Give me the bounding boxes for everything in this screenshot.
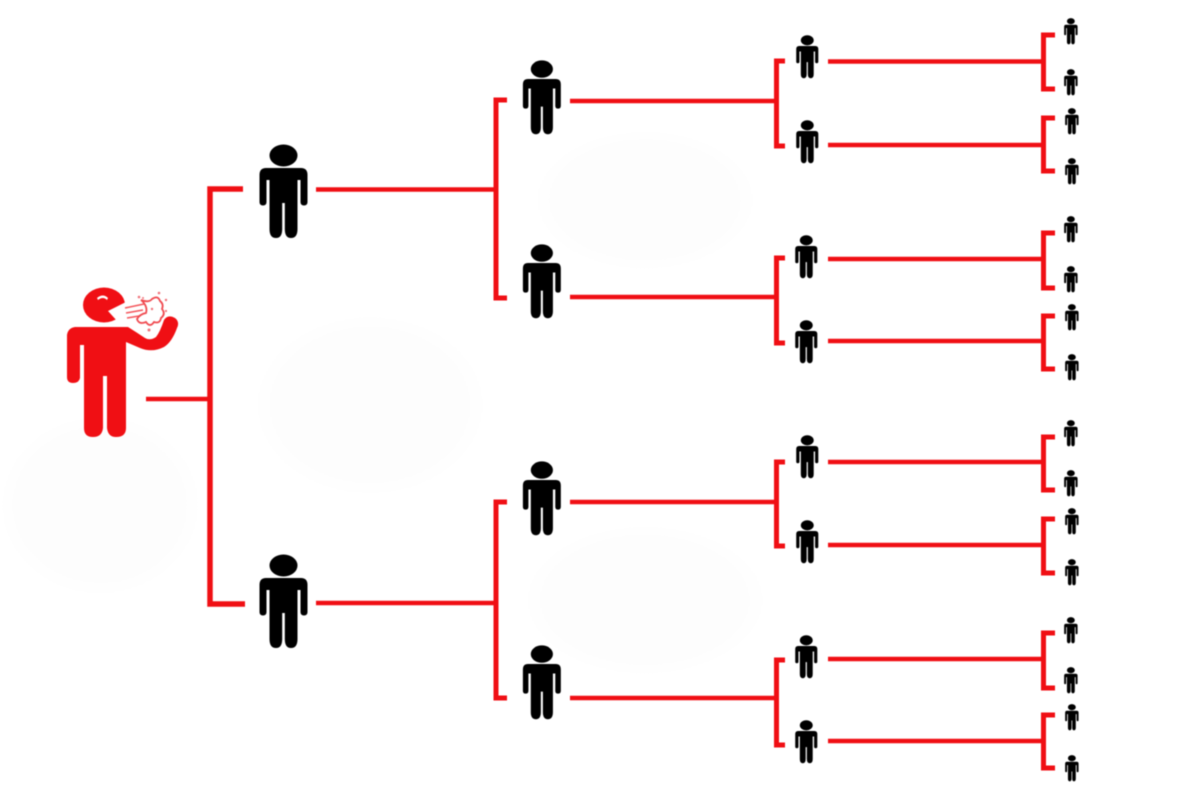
generation 4 people: [1064, 18, 1079, 781]
generation 1 people: [260, 144, 308, 648]
generation 2 people: [523, 60, 561, 719]
red connector lines: [146, 35, 1055, 768]
generation 3 people: [795, 35, 818, 763]
icon: coughing person (red): [67, 288, 178, 437]
